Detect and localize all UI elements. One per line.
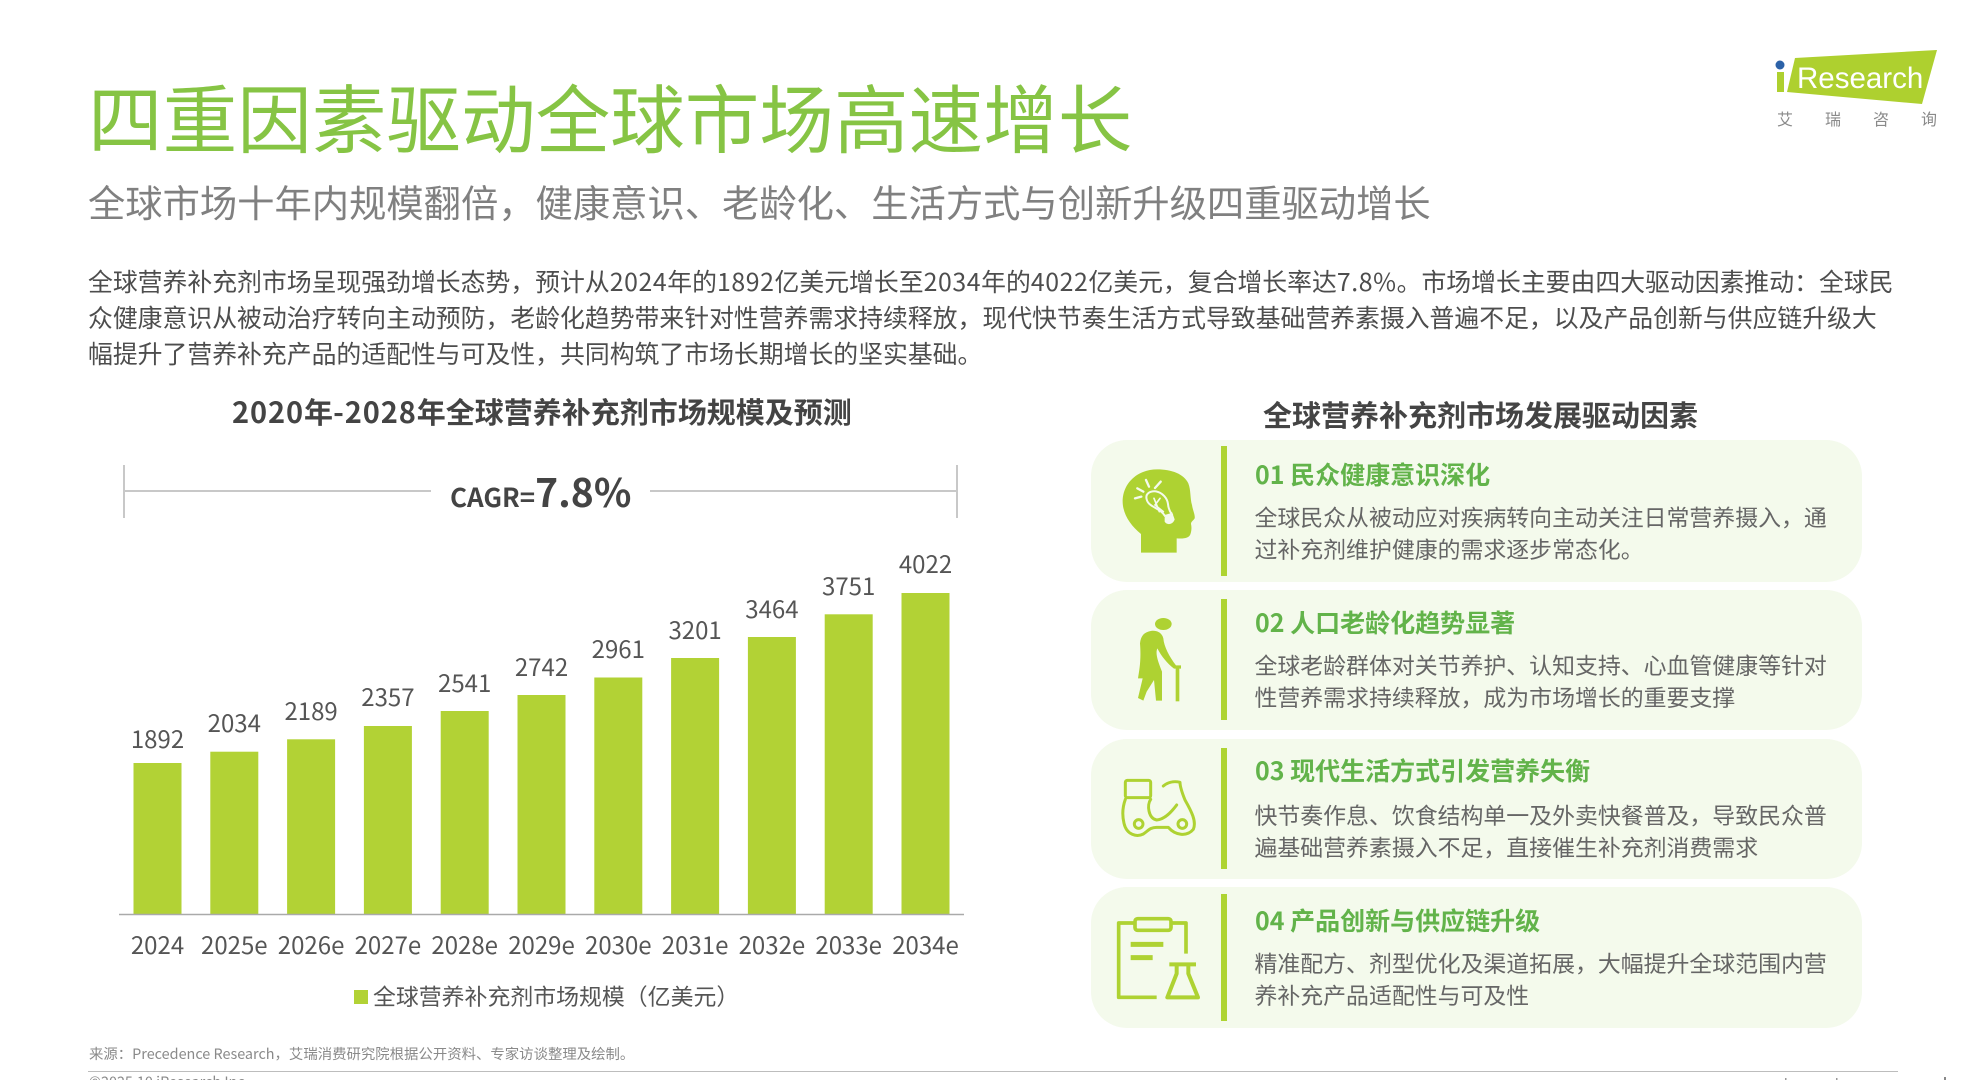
value labels: 3464: [745, 590, 799, 625]
logo: iResearch: [1776, 50, 1937, 130]
footer rule: [88, 1071, 1898, 1072]
category labels: 2034e: [892, 926, 959, 961]
category labels: 2026e: [278, 926, 344, 961]
category labels: 2024: [131, 926, 184, 961]
driver text: 全球老龄群体对关节养护、认知支持、心血管健康等针对: [1254, 646, 1827, 680]
category labels: 2032e: [739, 926, 805, 961]
icon: clipboard and flask: [1116, 916, 1200, 1000]
CAGR bracket: [124, 465, 957, 518]
value labels: 2034: [208, 704, 261, 739]
value labels: 2742: [515, 648, 568, 683]
accent bar: [1221, 599, 1227, 720]
value labels: 2357: [361, 678, 415, 713]
value labels: 3201: [668, 611, 722, 646]
title: 四重因素驱动全球市场高速增长: [88, 61, 1132, 169]
driver title: 03 现代生活方式引发营养失衡: [1255, 752, 1590, 788]
driver text: 养补充产品适配性与可及性: [1254, 976, 1529, 1010]
icon: head with light bulb: [1122, 469, 1195, 553]
category labels: 2030e: [585, 926, 652, 961]
intro paragraph: 众健康意识从被动治疗转向主动预防，老龄化趋势带来针对性营养需求持续释放，现代快节奏生活方式导致基础营养素摄入普遍不足，以及产品创新与供应链升级大: [88, 299, 1877, 335]
footer marks (clipped): [1785, 1077, 1946, 1080]
logo: iResearch: 询: [1921, 106, 1937, 130]
category labels: 2031e: [662, 926, 728, 961]
logo: iResearch: Research: [1797, 62, 1923, 95]
driver text: 过补充剂维护健康的需求逐步常态化。: [1254, 530, 1644, 564]
driver title: 04 产品创新与供应链升级: [1255, 902, 1540, 938]
icon: elderly person with cane: [1138, 618, 1181, 702]
axis: [119, 914, 964, 916]
value labels: 2189: [284, 692, 338, 727]
value labels: 2541: [438, 664, 491, 699]
driver text: 快节奏作息、饮食结构单一及外卖快餐普及，导致民众普: [1254, 796, 1827, 830]
driver text: 遍基础营养素摄入不足，直接催生补充剂消费需求: [1254, 828, 1758, 862]
value labels: [131, 545, 952, 755]
driver title: 01 民众健康意识深化: [1255, 456, 1490, 492]
chart heading: 2020年-2028年全球营养补充剂市场规模及预测: [232, 390, 852, 432]
driver title: 02 人口老龄化趋势显著: [1255, 604, 1515, 640]
driver text: 性营养需求持续释放，成为市场增长的重要支撑: [1254, 678, 1735, 712]
category labels: [131, 926, 959, 961]
CAGR label: CAGR=7.8%: [450, 463, 631, 519]
accent bar: [1221, 446, 1227, 576]
category labels: 2028e: [431, 926, 498, 961]
value labels: 1892: [131, 720, 184, 755]
icon: delivery scooter: [1121, 778, 1196, 837]
intro paragraph: 全球营养补充剂市场呈现强劲增长态势，预计从2024年的1892亿美元增长至2034年的4022亿美元，复合增长率达7.8%。市场增长主要由四大驱动因素推动：全球民: [88, 263, 1893, 299]
value labels: 4022: [899, 545, 952, 580]
logo: iResearch: 艾: [1777, 106, 1793, 130]
intro paragraph: 幅提升了营养补充产品的适配性与可及性，共同构筑了市场长期增长的坚实基础。: [88, 335, 982, 371]
category labels: 2033e: [815, 926, 882, 961]
panel: driver 01: [1091, 440, 1862, 582]
logo: iResearch: 瑞: [1825, 106, 1841, 130]
accent bar: [1221, 748, 1227, 869]
drivers heading: 全球营养补充剂市场发展驱动因素: [1263, 393, 1698, 435]
driver text: [1254, 796, 1827, 862]
logo: iResearch: 咨: [1873, 106, 1889, 130]
value labels: 2961: [592, 630, 645, 665]
bar chart: market size: [119, 463, 964, 1012]
driver text: [1254, 498, 1827, 564]
driver text: 全球民众从被动应对疾病转向主动关注日常营养摄入，通: [1254, 498, 1827, 532]
value labels: 3751: [822, 567, 875, 602]
intro paragraph: [88, 263, 1893, 371]
driver text: 精准配方、剂型优化及渠道拓展，大幅提升全球范围内营: [1254, 944, 1827, 978]
panel: driver 03: [1091, 739, 1862, 879]
panel: driver 04: [1091, 887, 1862, 1028]
panel: driver 02: [1091, 590, 1862, 730]
driver text: [1254, 944, 1827, 1010]
driver text: [1254, 646, 1827, 712]
bars: [134, 593, 950, 914]
accent bar: [1221, 894, 1227, 1021]
category labels: 2027e: [355, 926, 421, 961]
category labels: 2029e: [508, 926, 575, 961]
legend: 全球营养补充剂市场规模（亿美元）: [373, 978, 739, 1012]
source note: 来源：Precedence Research，艾瑞消费研究院根据公开资料、专家访谈整理及绘制。: [89, 1043, 634, 1064]
subtitle: 全球市场十年内规模翻倍，健康意识、老龄化、生活方式与创新升级四重驱动增长: [88, 174, 1431, 228]
category labels: 2025e: [201, 926, 268, 961]
